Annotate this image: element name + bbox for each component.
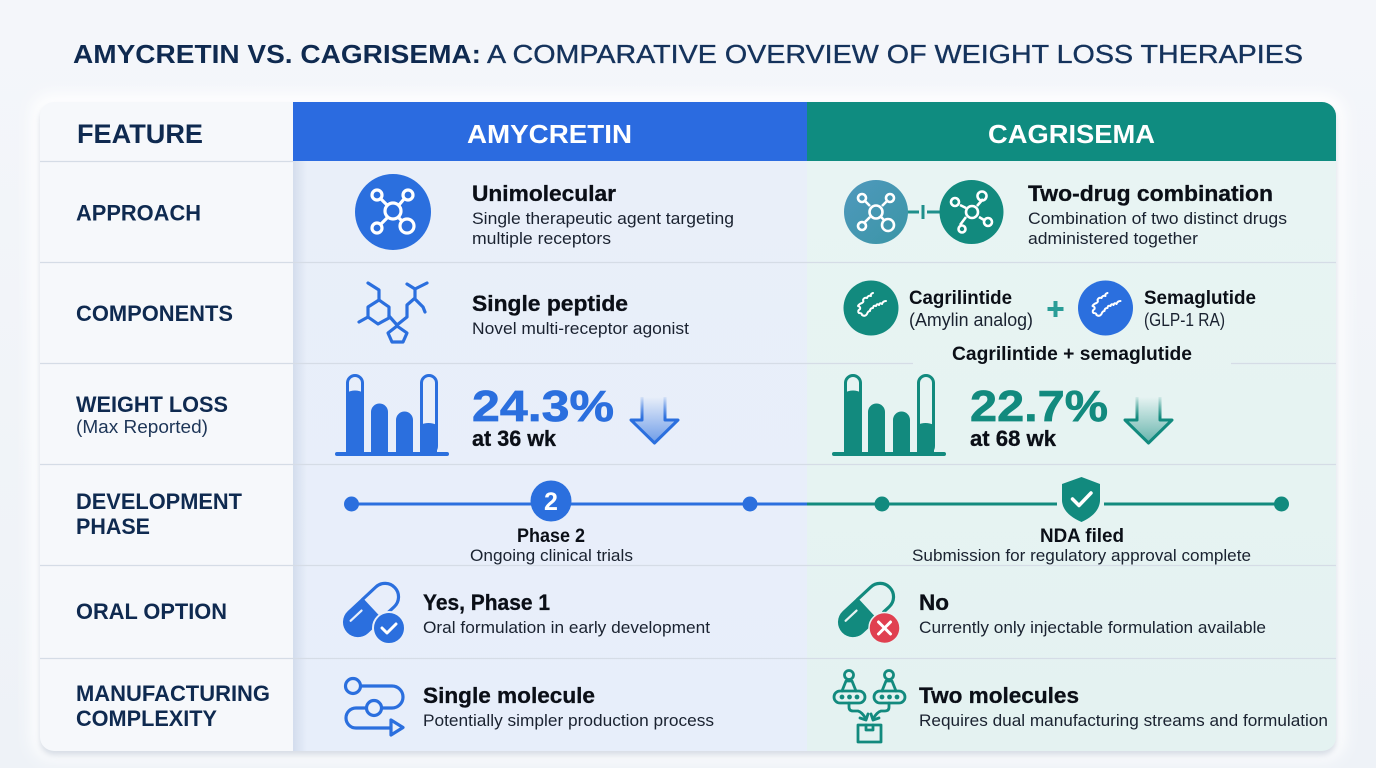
text: single molecule bbox=[423, 683, 714, 730]
text: two molecules: Requires dual manufacturing streams and formulation bbox=[919, 711, 1328, 730]
text: unimolecular: Unimolecular bbox=[472, 181, 616, 206]
row label: development phase: PHASE bbox=[76, 514, 150, 539]
component: semaglutide: Semaglutide bbox=[1144, 288, 1256, 309]
text: single molecule: Potentially simpler production process bbox=[423, 711, 714, 730]
component: semaglutide: (GLP-1 RA) bbox=[1144, 310, 1225, 330]
icon: unimolecular bbox=[355, 174, 431, 250]
label: cagrilintide + semaglutide: Cagrilintide + semaglutide bbox=[952, 344, 1192, 365]
stat: 22.7% at 68 wk: 22.7% bbox=[970, 382, 1108, 431]
icon: pill with check bbox=[343, 582, 404, 643]
text: no: Currently only injectable formulation available bbox=[919, 618, 1266, 637]
icon: pill with cross bbox=[838, 582, 900, 643]
text: yes, phase 1: Oral formulation in early development bbox=[423, 618, 710, 637]
text: two-drug combination: Two-drug combination bbox=[1028, 181, 1273, 206]
text: nda filed: NDA filed bbox=[1040, 526, 1124, 547]
icon: two drugs joined bbox=[844, 180, 1004, 244]
stat: 22.7% at 68 wk: at 68 wk bbox=[970, 426, 1057, 451]
chart icon: bars bbox=[335, 376, 449, 456]
row label: manufacturing complexity: COMPLEXITY bbox=[76, 706, 217, 731]
icon: plus bbox=[1048, 301, 1064, 317]
arrow: down bbox=[631, 397, 678, 443]
text: phase 2: Ongoing clinical trials bbox=[470, 546, 633, 565]
text: no: No bbox=[919, 590, 949, 615]
text: phase 2 bbox=[470, 526, 633, 565]
stat: 24.3% at 36 wk: 24.3% bbox=[472, 382, 614, 431]
text: no bbox=[919, 590, 1266, 637]
row label: development phase bbox=[77, 494, 242, 534]
icon: peptide molecule bbox=[359, 283, 427, 342]
phase timeline: amycretin bbox=[344, 480, 807, 522]
panel: feature column bbox=[40, 102, 293, 751]
text: yes, phase 1: Yes, Phase 1 bbox=[423, 590, 550, 615]
column header: cagrisema bbox=[807, 102, 1336, 161]
arrow: down bbox=[1125, 397, 1172, 443]
text: single peptide: Single peptide bbox=[472, 291, 628, 316]
component: cagrilintide bbox=[844, 280, 1033, 336]
component: semaglutide bbox=[1078, 280, 1256, 336]
column header: amycretin bbox=[293, 102, 807, 161]
row label: weight loss: WEIGHT LOSS bbox=[76, 392, 228, 417]
text: two-drug combination: administered together bbox=[1028, 229, 1198, 248]
title: A COMPARATIVE OVERVIEW OF WEIGHT LOSS THERAPIES bbox=[487, 39, 1303, 69]
panel: amycretin column bbox=[293, 102, 807, 751]
text: unimolecular: Single therapeutic agent targeting bbox=[472, 209, 734, 228]
text: single molecule: Single molecule bbox=[423, 683, 595, 708]
phase timeline: cagrisema bbox=[807, 477, 1289, 522]
row label: weight loss bbox=[76, 396, 228, 437]
row label: oral option: ORAL OPTION bbox=[76, 599, 227, 624]
comparison table bbox=[40, 102, 1336, 751]
row label: manufacturing complexity bbox=[76, 686, 269, 726]
column header: cagrisema: CAGRISEMA bbox=[988, 119, 1155, 149]
stat: 22.7% at 68 wk bbox=[970, 390, 1108, 446]
text: yes, phase 1 bbox=[423, 590, 710, 637]
panel: cagrisema column bbox=[807, 102, 1336, 751]
heading: feature: FEATURE bbox=[77, 119, 203, 149]
text: nda filed bbox=[912, 526, 1251, 565]
chart icon: bars bbox=[832, 376, 946, 456]
component: cagrilintide: Cagrilintide bbox=[909, 288, 1012, 309]
stat: 24.3% at 36 wk: at 36 wk bbox=[472, 426, 557, 451]
component: cagrilintide: (Amylin analog) bbox=[909, 310, 1033, 330]
text: two-drug combination bbox=[1028, 181, 1287, 248]
text: single peptide bbox=[472, 291, 689, 338]
text: two-drug combination: Combination of two distinct drugs bbox=[1028, 209, 1287, 228]
title bbox=[73, 39, 1303, 69]
icon: dual manufacturing streams bbox=[834, 670, 905, 742]
row label: development phase: DEVELOPMENT bbox=[76, 489, 243, 514]
text: phase 2: Phase 2 bbox=[517, 526, 585, 547]
title: AMYCRETIN VS. CAGRISEMA: bbox=[73, 39, 481, 69]
text: single peptide: Novel multi-receptor agonist bbox=[472, 319, 689, 338]
phase timeline: amycretin: 2 bbox=[544, 488, 558, 516]
stat: 24.3% at 36 wk bbox=[472, 390, 614, 446]
text: nda filed: Submission for regulatory approval complete bbox=[912, 546, 1251, 565]
row label: weight loss: (Max Reported) bbox=[76, 417, 208, 437]
icon: simple process flow bbox=[346, 678, 403, 735]
text: unimolecular: multiple receptors bbox=[472, 229, 611, 248]
text: two molecules bbox=[919, 683, 1328, 730]
row label: approach: APPROACH bbox=[76, 200, 201, 226]
text: two molecules: Two molecules bbox=[919, 683, 1079, 708]
row label: manufacturing complexity: MANUFACTURING bbox=[76, 681, 270, 706]
column header: amycretin: AMYCRETIN bbox=[467, 119, 632, 149]
text: unimolecular bbox=[472, 181, 734, 248]
row label: components: COMPONENTS bbox=[76, 301, 233, 326]
